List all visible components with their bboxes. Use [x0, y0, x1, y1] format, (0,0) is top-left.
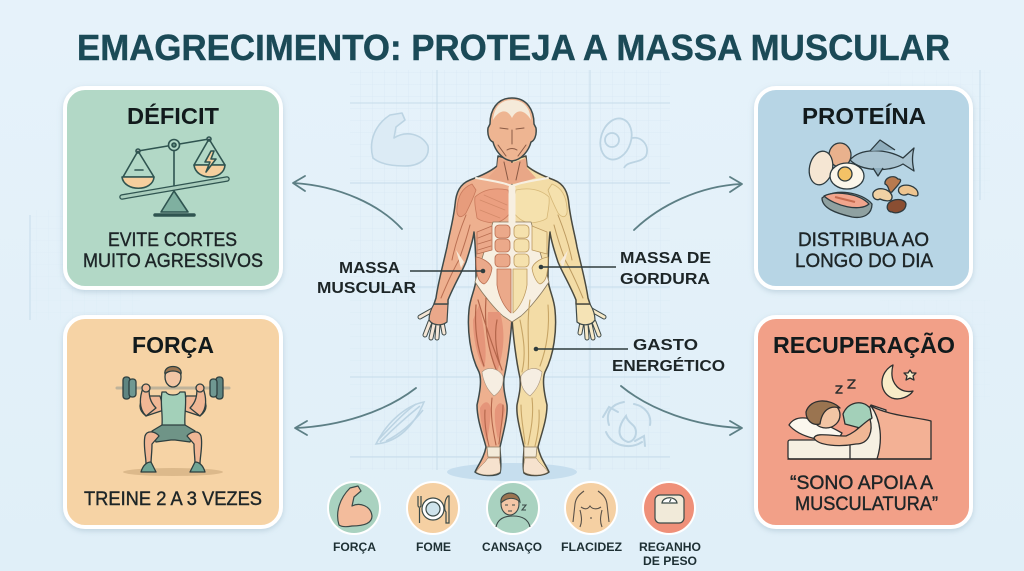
panel: proteína [756, 88, 971, 288]
callout: massa de gordura: GORDURA [620, 271, 710, 288]
icon: faint muscle fibres [376, 402, 424, 444]
shoulder muscle [457, 184, 476, 217]
callout: gasto energético [534, 337, 725, 375]
icon: faint bicep [372, 113, 428, 166]
text: proteína [795, 230, 933, 272]
text: déficit [83, 230, 263, 272]
symptom: reganho de peso: REGANHO [639, 540, 701, 554]
text: força: TREINE 2 A 3 VEZES [84, 489, 262, 510]
callout: gasto energético: GASTO [633, 337, 698, 354]
icon: barbell squat [117, 366, 229, 476]
symptom: fome: FOME [416, 540, 451, 554]
pelvis band [475, 222, 549, 322]
arm muscle lines [441, 215, 470, 298]
text: recuperação: “SONO APOIA A [790, 473, 933, 494]
arrow: to déficit [293, 176, 402, 229]
callout: massa muscular: MASSA [339, 260, 400, 277]
symptom: reganho de peso [639, 482, 701, 568]
panel: déficit [65, 88, 281, 288]
text: déficit: MUITO AGRESSIVOS [83, 251, 263, 272]
symptom: flacidez: FLACIDEZ [561, 540, 622, 554]
icon: faint flame cycle [603, 402, 650, 446]
muscle half [434, 156, 512, 476]
arrow: to recuperação [621, 386, 742, 435]
abdominal blocks: muscle side [476, 225, 511, 313]
heading: déficit: DÉFICIT [127, 102, 219, 129]
icon: balance scale [122, 137, 227, 215]
callout: massa muscular [317, 260, 485, 297]
symptom: cansaço: CANSAÇO [482, 540, 542, 554]
symptom: reganho de peso: DE PESO [643, 554, 697, 568]
icon: faint foods [595, 114, 647, 168]
icon: tired face [496, 493, 530, 527]
symptom: cansaço [482, 482, 542, 554]
icon: plate and cutlery [418, 496, 449, 523]
callout: massa muscular: MUSCULAR [317, 280, 416, 297]
symptom: força: FORÇA [333, 540, 376, 554]
text: proteína: DISTRIBUA AO [798, 230, 929, 251]
chest fat [514, 189, 549, 223]
chest muscle [475, 189, 510, 223]
icon: sleeping person [788, 365, 931, 459]
panel: recuperação [756, 317, 971, 527]
callout: gasto energético: ENERGÉTICO [612, 356, 725, 375]
title: EMAGRECIMENTO: PROTEJA A MASSA MUSCULAR [77, 27, 950, 68]
symptom: força [328, 482, 380, 554]
panel: força [65, 317, 281, 527]
abdominal blocks: fat side [513, 225, 548, 313]
arrow: to proteína [634, 177, 742, 230]
icon: protein foods [806, 140, 918, 217]
text: proteína: LONGO DO DIA [795, 251, 933, 272]
icon: torso [573, 491, 609, 527]
callout: massa de gordura: MASSA DE [620, 250, 711, 267]
icon: flexed arm [338, 486, 372, 527]
heading: proteína: PROTEÍNA [802, 102, 926, 129]
head and neck [488, 98, 536, 161]
fat half [512, 156, 590, 476]
leg details: fat side [520, 300, 549, 372]
callout: massa de gordura [539, 250, 711, 288]
anatomical figure [420, 98, 604, 476]
text: recuperação: MUSCULATURA” [795, 494, 938, 515]
heading: recuperação: RECUPERAÇÃO [773, 331, 955, 358]
symptom: flacidez [561, 482, 622, 554]
text: recuperação [790, 473, 938, 515]
arrow: to força [295, 388, 416, 435]
text: déficit: EVITE CORTES [108, 230, 237, 251]
heading: força: FORÇA [132, 332, 214, 358]
body shadow [447, 463, 577, 481]
leg details: muscle side [473, 305, 486, 368]
hand: left [420, 304, 448, 338]
symptom: fome [407, 482, 459, 554]
hand: right [576, 304, 604, 338]
icon: weighing scale [655, 495, 684, 523]
